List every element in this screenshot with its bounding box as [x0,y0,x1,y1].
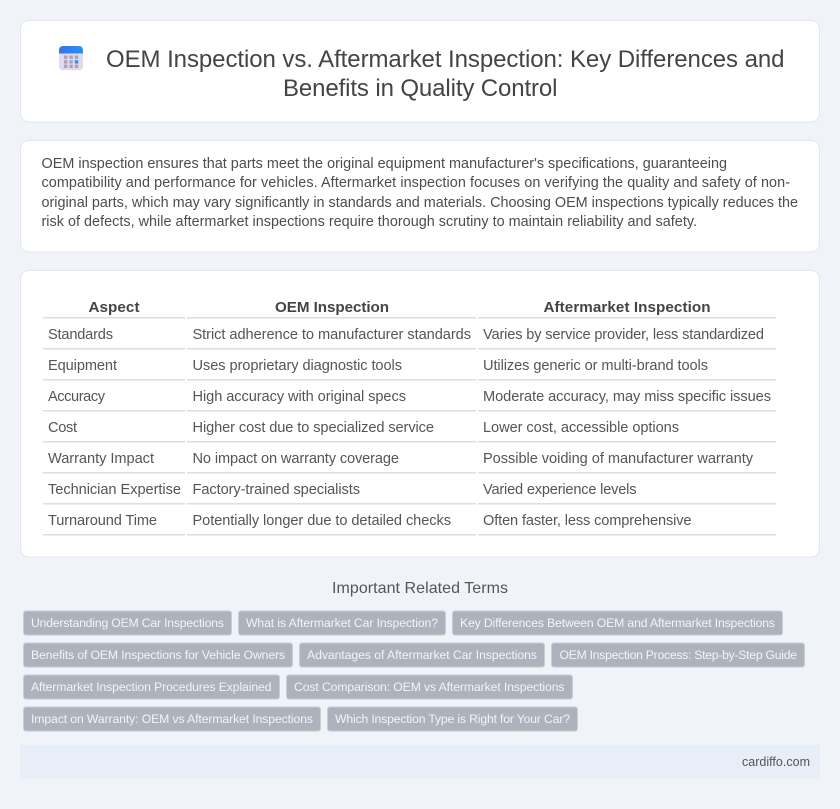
tag [24,643,292,667]
table row: accuracy: Moderate accuracy, may miss specific issues [483,389,771,405]
heading: title: Benefits in Quality Control [283,75,558,102]
table row: standards: Standards [48,327,113,343]
tag [328,707,578,731]
table row: turnaround time: Turnaround Time [48,513,157,529]
tag: Key Differences Between OEM and Aftermarket Inspections [460,616,775,630]
text block: intro paragraph: risk of defects, while aftermarket inspections require thorough scrutiny to maintain reliability and safety. [42,214,697,230]
table row: equipment: Uses proprietary diagnostic tools [192,358,402,374]
tag: Which Inspection Type is Right for Your Car? [335,712,570,726]
tag: Cost Comparison: OEM vs Aftermarket Inspections [294,680,564,694]
table row: warranty impact: Possible voiding of manufacturer warranty [483,451,754,467]
text block: intro paragraph: OEM inspection ensures that parts meet the original equipment manufacturer's specifications, guaranteeing [42,156,727,172]
table row: turnaround time: Often faster, less comprehensive [483,513,692,529]
panel: intro text [20,140,820,252]
table row: accuracy: High accuracy with original specs [192,389,406,405]
tag: What is Aftermarket Car Inspection? [246,616,438,630]
tag: Advantages of Aftermarket Car Inspections [307,648,537,662]
table row: cost [48,420,679,436]
table row: standards [48,327,764,343]
heading: title: OEM Inspection vs. Aftermarket Inspection: Key Differences and [106,46,784,73]
table row: technician expertise [48,482,636,498]
tag [238,611,446,635]
table row: equipment: Equipment [48,358,117,374]
panel: comparison table [20,270,820,557]
table row: turnaround time: Potentially longer due to detailed checks [192,513,451,529]
table row: equipment: Utilizes generic or multi-brand tools [483,358,708,374]
table row: cost: Lower cost, accessible options [483,420,679,436]
heading: related terms: Important Related Terms [332,580,508,597]
table row: equipment [48,358,708,374]
tag [24,611,232,635]
table row: accuracy: Accuracy [48,389,106,405]
tag: OEM Inspection Process: Step-by-Step Guide [560,648,797,662]
tag [552,643,804,667]
table row: standards: Strict adherence to manufacturer standards [192,327,471,343]
text block: intro paragraph [42,156,798,230]
tag: Impact on Warranty: OEM vs Aftermarket Inspections [31,712,313,726]
table header: OEM Inspection [275,299,389,316]
text block: intro paragraph: compatibility and performance for vehicles. Aftermarket inspection focuses on verifying the quality and safety of non- [42,175,790,191]
table row: warranty impact: No impact on warranty coverage [192,451,399,467]
footer site name: cardiffo.com [742,755,810,769]
tag: Understanding OEM Car Inspections [31,616,224,630]
tag: Aftermarket Inspection Procedures Explained [31,680,272,694]
table header: Aftermarket Inspection [544,299,710,316]
tag [24,707,320,731]
tag: Benefits of OEM Inspections for Vehicle Owners [31,648,285,662]
tag [286,675,572,699]
table header: Aspect [88,299,140,316]
table row: turnaround time [48,513,692,529]
icon: calendar [59,46,83,70]
tag list: related terms [24,611,804,731]
table row: technician expertise: Factory-trained specialists [192,482,360,498]
table row: cost: Higher cost due to specialized service [192,420,434,436]
tag [300,643,544,667]
footer [20,745,820,779]
tag [24,675,280,699]
table row: cost: Cost [48,420,77,436]
table row: accuracy [48,389,771,405]
panel: title header [20,20,820,122]
table row: technician expertise: Varied experience levels [483,482,636,498]
tag [452,611,782,635]
table header [88,299,710,316]
table row: technician expertise: Technician Expertise [48,482,181,498]
heading: title [106,46,784,102]
table row: warranty impact: Warranty Impact [48,451,154,467]
table row: standards: Varies by service provider, less standardized [483,327,764,343]
table row: warranty impact [48,451,754,467]
text block: intro paragraph: original parts, which may vary significantly in standards and materials. Choosing OEM inspections typically reduces the [42,195,798,211]
